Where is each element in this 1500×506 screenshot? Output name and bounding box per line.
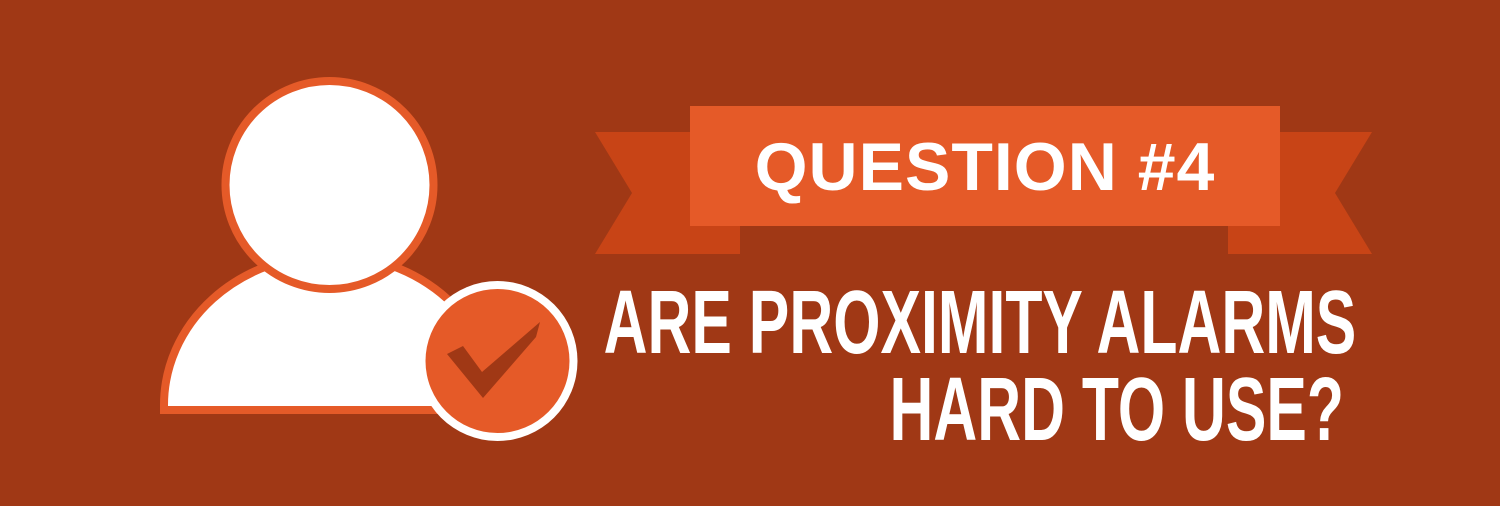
main question heading: ARE PROXIMITY ALARMS — [604, 273, 1356, 373]
main question heading: HARD TO USE? — [889, 360, 1344, 460]
main question heading — [604, 273, 1356, 460]
ribbon left tail — [595, 132, 740, 254]
person body — [164, 255, 496, 410]
ribbon label: QUESTION #4 — [755, 129, 1215, 205]
ribbon right tail — [1228, 132, 1372, 254]
ribbon main — [690, 106, 1280, 226]
check badge — [418, 281, 578, 441]
person head — [226, 81, 434, 289]
